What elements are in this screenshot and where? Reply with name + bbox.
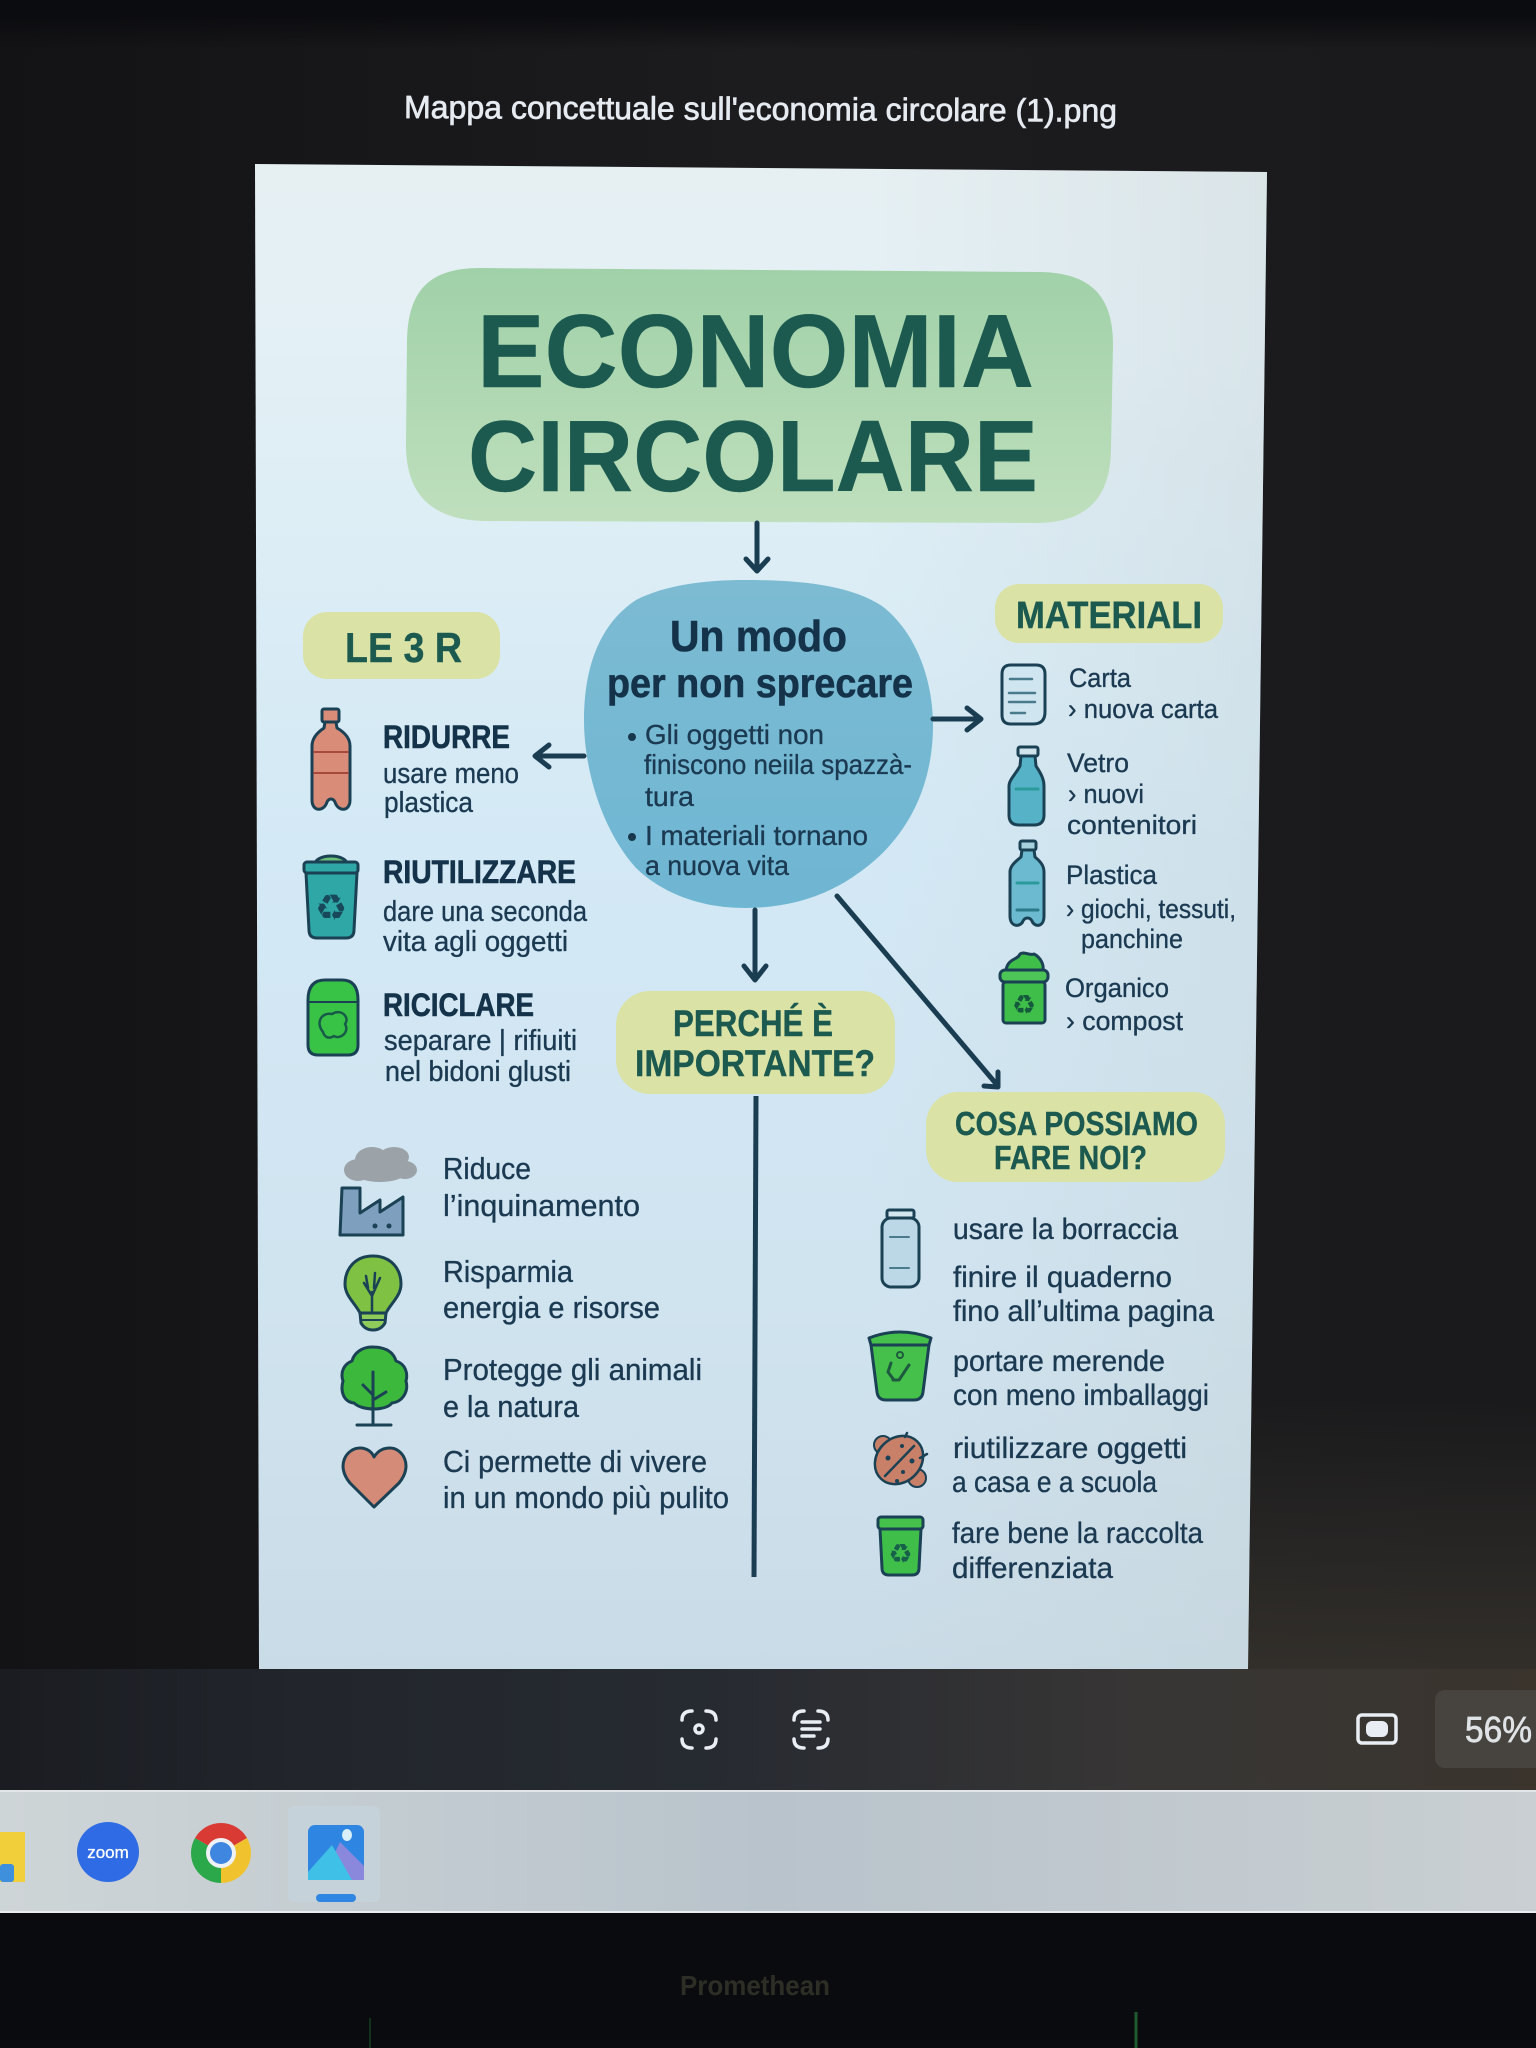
arrow: centre to materiali xyxy=(933,708,981,730)
text: riciclare: RICICLARE xyxy=(383,987,534,1023)
icon: zoom app: zoom xyxy=(87,1843,129,1862)
heading: cosa possiamo fare noi: COSA POSSIAMO xyxy=(955,1105,1198,1142)
icon: plastic bottle xyxy=(1010,841,1044,925)
text: fare bene la raccolta: fare bene la raccolta xyxy=(952,1517,1203,1550)
text: risparmia energia xyxy=(443,1254,660,1325)
text: fare bene la raccolta xyxy=(952,1517,1203,1585)
heading: materiali xyxy=(995,584,1223,643)
text: usare la borraccia: usare la borraccia xyxy=(953,1213,1178,1246)
text: ci permette di vivere: in un mondo più pulito xyxy=(443,1480,729,1515)
text: riutilizzare oggetti xyxy=(952,1432,1187,1499)
text: finire il quaderno xyxy=(953,1261,1214,1328)
title: ECONOMIA xyxy=(477,294,1034,410)
icon: red plastic bottle xyxy=(312,709,350,809)
text: riduce l'inquinamento: l’inquinamento xyxy=(443,1188,640,1223)
text: ridurre xyxy=(383,719,519,819)
icon: folder app xyxy=(0,1832,25,1882)
vertical divider line xyxy=(754,1096,756,1577)
icon: zoom app xyxy=(77,1822,139,1882)
text: carta: › nuova carta xyxy=(1068,694,1219,724)
panel: central bubble: a nuova vita xyxy=(645,850,789,881)
text: finire il quaderno: finire il quaderno xyxy=(953,1261,1172,1294)
text: protegge gli animali: Protegge gli animali xyxy=(443,1352,702,1387)
panel: central bubble: Gli oggetti non xyxy=(645,719,824,750)
text: riutilizzare xyxy=(383,854,588,958)
text: riutilizzare: vita agli oggetti xyxy=(383,926,568,958)
text: ci permette di vivere xyxy=(443,1444,729,1515)
arrow: title to centre xyxy=(746,523,768,571)
taskbar xyxy=(0,1790,1536,1913)
text: vetro: Vetro xyxy=(1067,748,1129,778)
text: riciclare: nel bidoni glusti xyxy=(385,1056,571,1088)
icon: teal bin xyxy=(304,856,358,938)
icon: ladybug shaped item xyxy=(865,1426,933,1494)
heading: cosa possiamo fare noi xyxy=(926,1092,1225,1182)
text: fare bene la raccolta: differenziata xyxy=(952,1552,1113,1585)
text: protegge gli animali: e la natura xyxy=(443,1389,580,1424)
brand: promethean: Promethean xyxy=(680,1970,830,2001)
text: riduce l'inquinamento xyxy=(443,1151,640,1223)
panel: central bubble xyxy=(584,580,933,908)
text: vetro: › nuovi xyxy=(1068,779,1144,809)
icon: factory with smoke xyxy=(340,1147,417,1235)
icon: visual search xyxy=(682,1711,716,1748)
icon: organic bin: ♻ xyxy=(1012,990,1036,1021)
title xyxy=(406,268,1113,523)
icon: recycling bin xyxy=(878,1517,923,1575)
text: portare merende: con meno imballaggi xyxy=(953,1379,1209,1412)
icon: recycling bin: ♻ xyxy=(888,1539,913,1570)
heading: le 3 R xyxy=(303,612,500,679)
text: plastica: panchine xyxy=(1081,924,1183,954)
zoom level button: 56% xyxy=(1465,1709,1532,1750)
text: portare merende: portare merende xyxy=(953,1345,1165,1378)
icon: organic bin xyxy=(1000,953,1048,1023)
viewer toolbar xyxy=(0,1669,1536,1791)
text: riutilizzare oggetti: riutilizzare oggetti xyxy=(953,1432,1187,1465)
panel: central bubble: finiscono neiila spazzà- xyxy=(644,749,912,780)
icon: heart xyxy=(343,1448,406,1507)
heading: perché è importante xyxy=(616,991,895,1094)
icon: light bulb with plant xyxy=(345,1256,401,1330)
icon: photos app xyxy=(288,1806,380,1902)
text: riutilizzare oggetti: a casa e a scuola xyxy=(952,1466,1157,1499)
text: risparmia energia: Risparmia xyxy=(443,1254,574,1289)
text: organico: Organico xyxy=(1065,973,1169,1003)
text: ridurre: plastica xyxy=(384,787,474,819)
icon: text scan xyxy=(794,1711,828,1748)
text: riutilizzare: dare una seconda xyxy=(383,896,588,928)
text: ci permette di vivere: Ci permette di vivere xyxy=(443,1444,707,1479)
text: vetro xyxy=(1067,748,1197,840)
text: vetro: contenitori xyxy=(1067,810,1197,840)
title: CIRCOLARE xyxy=(468,401,1038,513)
text: protegge gli animali xyxy=(443,1352,702,1424)
heading: materiali: MATERIALI xyxy=(1016,595,1202,637)
window title: file name: Mappa concettuale sull'economia circolare (1).png xyxy=(404,89,1117,129)
text: carta xyxy=(1068,663,1219,724)
icon: chrome app xyxy=(191,1823,251,1883)
icon: paper sheet xyxy=(1002,665,1045,724)
zoom level button xyxy=(1435,1690,1536,1768)
text: organico: › compost xyxy=(1066,1006,1183,1036)
icon: glass bottle xyxy=(1009,747,1044,825)
text: plastica: › giochi, tessuti, xyxy=(1066,894,1236,924)
panel: infographic sheet xyxy=(255,164,1267,1669)
panel: central bubble: tura xyxy=(645,781,694,812)
arrow: centre to perché è importante xyxy=(744,910,766,980)
monitor bezel xyxy=(0,1913,1536,2048)
text: carta: Carta xyxy=(1069,663,1132,693)
text: riciclare: separare | rifiuiti xyxy=(384,1025,577,1057)
arrow: centre to cosa possiamo fare noi xyxy=(837,896,998,1087)
text: finire il quaderno: fino all’ultima pagina xyxy=(953,1295,1214,1328)
panel: central bubble: Un modo xyxy=(670,612,847,661)
heading: perché è importante: PERCHÉ È xyxy=(673,1003,833,1044)
arrow: centre to le 3 R xyxy=(535,745,584,767)
heading: cosa possiamo fare noi: FARE NOI? xyxy=(994,1139,1147,1176)
icon: water bottle xyxy=(882,1210,919,1287)
text: riduce l'inquinamento: Riduce xyxy=(443,1151,531,1186)
text: risparmia energia: energia e risorse xyxy=(443,1290,660,1325)
icon: tree xyxy=(342,1347,407,1425)
text: riciclare xyxy=(383,987,577,1088)
text: riutilizzare: RIUTILIZZARE xyxy=(383,854,576,890)
text: ridurre: RIDURRE xyxy=(383,719,510,755)
icon: teal bin: ♻ xyxy=(315,888,347,929)
icon: green bucket xyxy=(869,1332,931,1400)
heading: perché è importante: IMPORTANTE? xyxy=(635,1043,875,1084)
panel: central bubble: per non sprecare xyxy=(607,660,913,706)
text: portare merende xyxy=(953,1345,1209,1412)
text: ridurre: usare meno xyxy=(383,758,519,790)
text: organico xyxy=(1065,973,1183,1036)
heading: le 3 R: LE 3 R xyxy=(345,624,462,671)
text: plastica: Plastica xyxy=(1066,860,1158,890)
text: plastica xyxy=(1066,860,1236,954)
panel: central bubble: I materiali tornano xyxy=(645,820,868,851)
icon: green bin xyxy=(308,980,358,1055)
icon: fit to window xyxy=(1358,1715,1396,1743)
